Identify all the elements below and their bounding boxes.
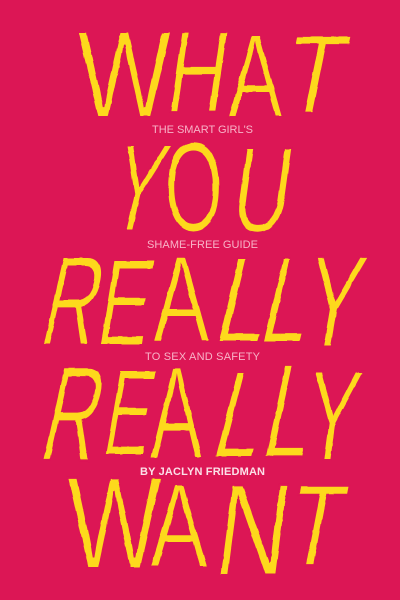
title word: REALLY (second): L [252, 337, 331, 486]
title word: REALLY (first): Y [295, 228, 375, 375]
title word: REALLY (second): Y [297, 344, 369, 488]
title word: YOU: O [164, 117, 223, 260]
title word: WANT [67, 450, 357, 600]
title word: WHAT: T [274, 12, 358, 137]
title word: WANT: N [208, 456, 300, 600]
title word: WANT: W [67, 450, 161, 596]
title word: WHAT: W [77, 5, 171, 143]
title word: REALLY (second): R [31, 338, 119, 489]
title word: WANT: T [278, 461, 357, 589]
title word: WHAT [77, 5, 358, 143]
title word: REALLY (second): L [201, 345, 284, 483]
title word: REALLY (first): E [89, 235, 164, 372]
title word: REALLY (second): E [95, 343, 166, 482]
title word: REALLY (first): A [153, 231, 210, 369]
subtitle line 1: THE SMART GIRL'S [152, 124, 253, 136]
subtitle line 2: SHAME-FREE GUIDE [147, 239, 258, 251]
title word: REALLY (first): L [250, 231, 329, 368]
title word: REALLY (first): L [204, 233, 287, 369]
title word: REALLY (second): A [150, 339, 203, 486]
title word: WHAT: H [160, 8, 238, 137]
title word: YOU: Y [98, 119, 180, 257]
title word: WANT: A [150, 461, 208, 593]
title word: YOU: U [225, 123, 302, 259]
title word: REALLY (first): R [31, 229, 118, 372]
title word: YOU [98, 117, 302, 260]
title word: REALLY (second) [31, 337, 369, 489]
title word: WHAT: A [228, 9, 283, 143]
title word: REALLY (first) [31, 228, 375, 375]
author: BY JACLYN FRIEDMAN [140, 466, 265, 478]
subtitle line 3: TO SEX AND SAFETY [145, 351, 261, 363]
